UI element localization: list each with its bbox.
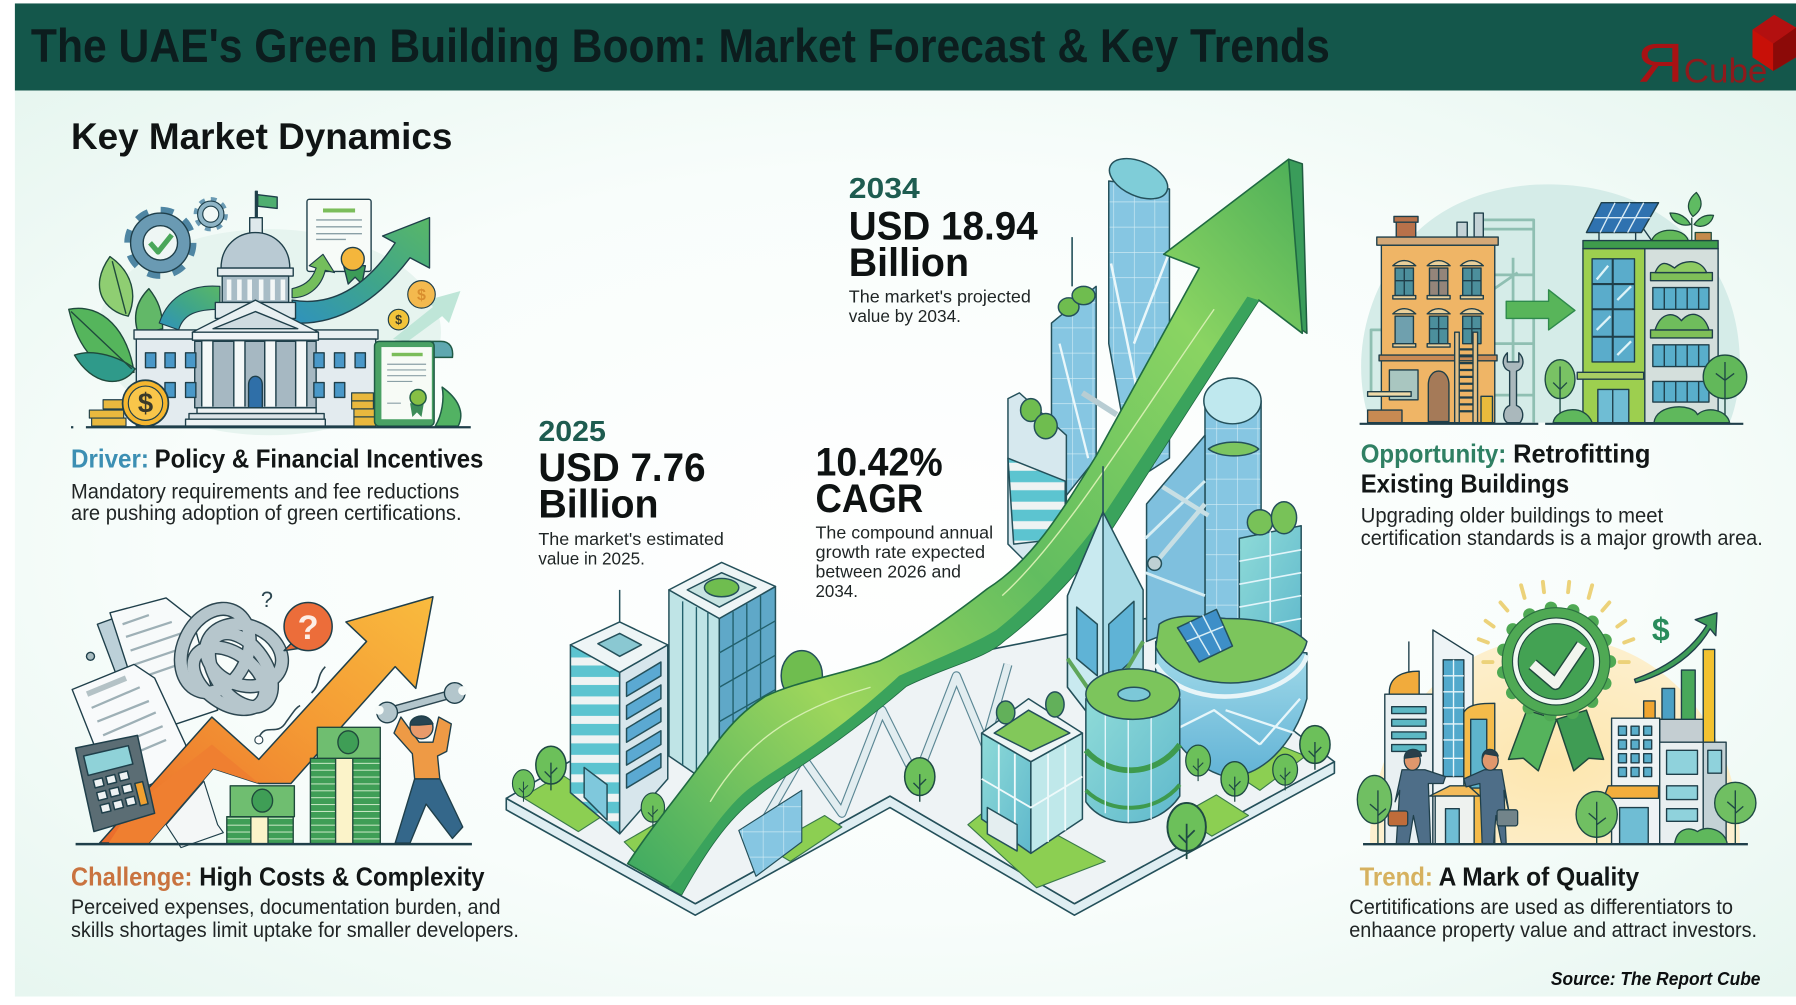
value [849,204,1038,285]
platform [506,619,1334,915]
trees left [512,746,665,827]
new building [1577,241,1718,423]
description: growth rate expected [816,542,985,562]
documents [72,598,218,790]
trees [1357,775,1756,844]
source note: Source: The Report Cube [1551,969,1760,990]
description: value in 2025. [538,549,645,569]
challenge heading: High Costs & Complexity [199,861,485,891]
slanted green top tower [1008,393,1066,573]
squiggle [259,667,325,738]
logo: RCube [1637,15,1796,93]
illustration: retrofitting buildings [1360,184,1747,424]
round base tower [1156,609,1307,777]
certificate with medal [307,199,371,284]
coin stacks [89,380,376,426]
stat: CAGR [816,440,993,601]
orange arrow [100,597,433,843]
description: The market's estimated [538,529,724,549]
trees and ground [1545,355,1747,423]
opportunity heading [1361,439,1651,499]
bridge trusses [756,664,1008,836]
year: 2025 [538,416,606,448]
value [538,446,706,527]
background circle [1361,184,1740,423]
illustration: policy and incentives: $ [395,313,402,327]
background tint [97,229,441,435]
trend heading: Trend: [1360,861,1433,891]
rooftop plants [1652,192,1714,241]
panel text: opportunity [1361,439,1763,550]
challenge heading [71,861,485,891]
cube block [982,692,1082,853]
value: Billion [849,241,969,285]
businessmen [1388,749,1518,844]
description [816,522,993,601]
ground line [1363,843,1748,845]
stat: 2025 value [538,416,724,569]
opportunity heading: Opportunity: [1361,439,1506,469]
value: CAGR [816,477,923,521]
illustration: policy and incentives [69,191,471,435]
description: between 2026 and [816,561,961,581]
knot of rings [168,598,291,722]
old building [1368,213,1498,423]
left low building [570,590,668,834]
icon: small gear [196,199,226,229]
trend heading: A Mark of Quality [1439,861,1639,891]
driver description: are pushing adoption of green certifications. [71,502,462,525]
panel text: trend [1349,861,1757,942]
value: 10.42% [816,440,943,484]
left tall building [669,562,822,790]
money stacks [227,727,380,844]
opportunity heading: Retrofitting [1513,439,1651,469]
arrow [1506,290,1575,330]
back towers [1008,150,1301,653]
ground line [71,426,471,428]
antenna tower [1051,237,1096,504]
section heading: Key Market Dynamics: Key Market Dynamics [71,116,452,157]
challenge description: skills shortages limit uptake for smaller developers. [71,919,519,942]
blue swoosh [159,286,220,330]
right buildings [1604,718,1726,844]
cylinder block [1086,669,1180,823]
challenge description: Perceived expenses, documentation burden, and [71,896,501,919]
logo: RCube: Cube [1684,52,1767,90]
illustration: policy and incentives: $ [417,286,426,304]
scroll certificate [375,341,461,426]
question bubble [261,587,332,651]
value [816,440,943,521]
description: The market's projected [849,286,1031,306]
description [538,529,724,569]
growth arrow [292,218,430,323]
ground line [76,843,472,845]
scaffolding [1371,220,1535,423]
spire tower [1068,466,1143,733]
left buildings [1385,630,1495,844]
pale arrow [393,291,460,341]
header bar [15,3,1796,93]
value: Billion [538,483,659,527]
trend description: Certitifications are used as differentiators to [1349,896,1733,919]
front trees [905,726,1330,859]
cylinder tower [1204,378,1261,641]
description: value by 2034. [849,306,961,326]
illustration: policy and incentives: $ [138,387,153,418]
panel text: challenge [71,861,519,942]
icon: leaves [69,257,163,381]
opportunity description: Upgrading older buildings to meet [1361,504,1663,527]
illustration: mark of quality [1357,582,1756,844]
driver heading: Driver: [71,443,149,473]
sun glow [1370,637,1740,844]
description [849,286,1031,326]
opportunity description [1361,504,1763,550]
challenge heading: Challenge: [71,861,192,891]
tall tower [1103,150,1174,481]
illustration: high costs and complexity [72,587,472,848]
trend description [1349,896,1757,942]
challenge description [71,896,519,942]
badge [1502,608,1610,715]
right block [1239,502,1301,653]
calculator [76,735,155,832]
question bubble: ? [261,587,273,612]
solar panel [1586,203,1659,241]
central chart: city and growth arrow [506,150,1334,915]
question bubble: ? [298,609,319,647]
front buildings [905,466,1330,859]
worker with wrench [375,683,467,843]
value: USD 18.94 [849,204,1038,248]
description: 2034. [816,581,858,601]
logo: RCube: Я [1637,31,1684,93]
wrench [1503,353,1523,423]
ribbons [1509,710,1604,771]
paper pile [166,781,223,848]
stat: 2034 value [849,173,1038,326]
icon: large gear [128,211,192,275]
driver heading: Policy & Financial Incentives [155,443,483,473]
lawns [522,733,1306,888]
trend heading [1360,861,1639,891]
growth arrow [628,159,1307,895]
growth arrow and bars: $ [1652,611,1670,647]
driver description: Mandatory requirements and fee reductions [71,480,459,503]
back glass [1147,435,1205,641]
growth arrow and bars [1634,611,1717,743]
driver description [71,480,462,525]
value: USD 7.76 [538,446,706,490]
description: The compound annual [816,522,993,542]
opportunity heading: Existing Buildings [1361,469,1569,499]
trend description: enhaance property value and attract investors. [1349,919,1757,942]
rays [1479,582,1633,662]
panel text: driver [71,443,483,525]
opportunity description: certification standards is a major growth area. [1361,527,1763,550]
building [134,191,378,426]
year: 2034 [849,173,920,205]
title: The UAE's Green Building Boom: Market Forecast & Key Trends [31,19,1330,72]
coins [388,281,435,330]
